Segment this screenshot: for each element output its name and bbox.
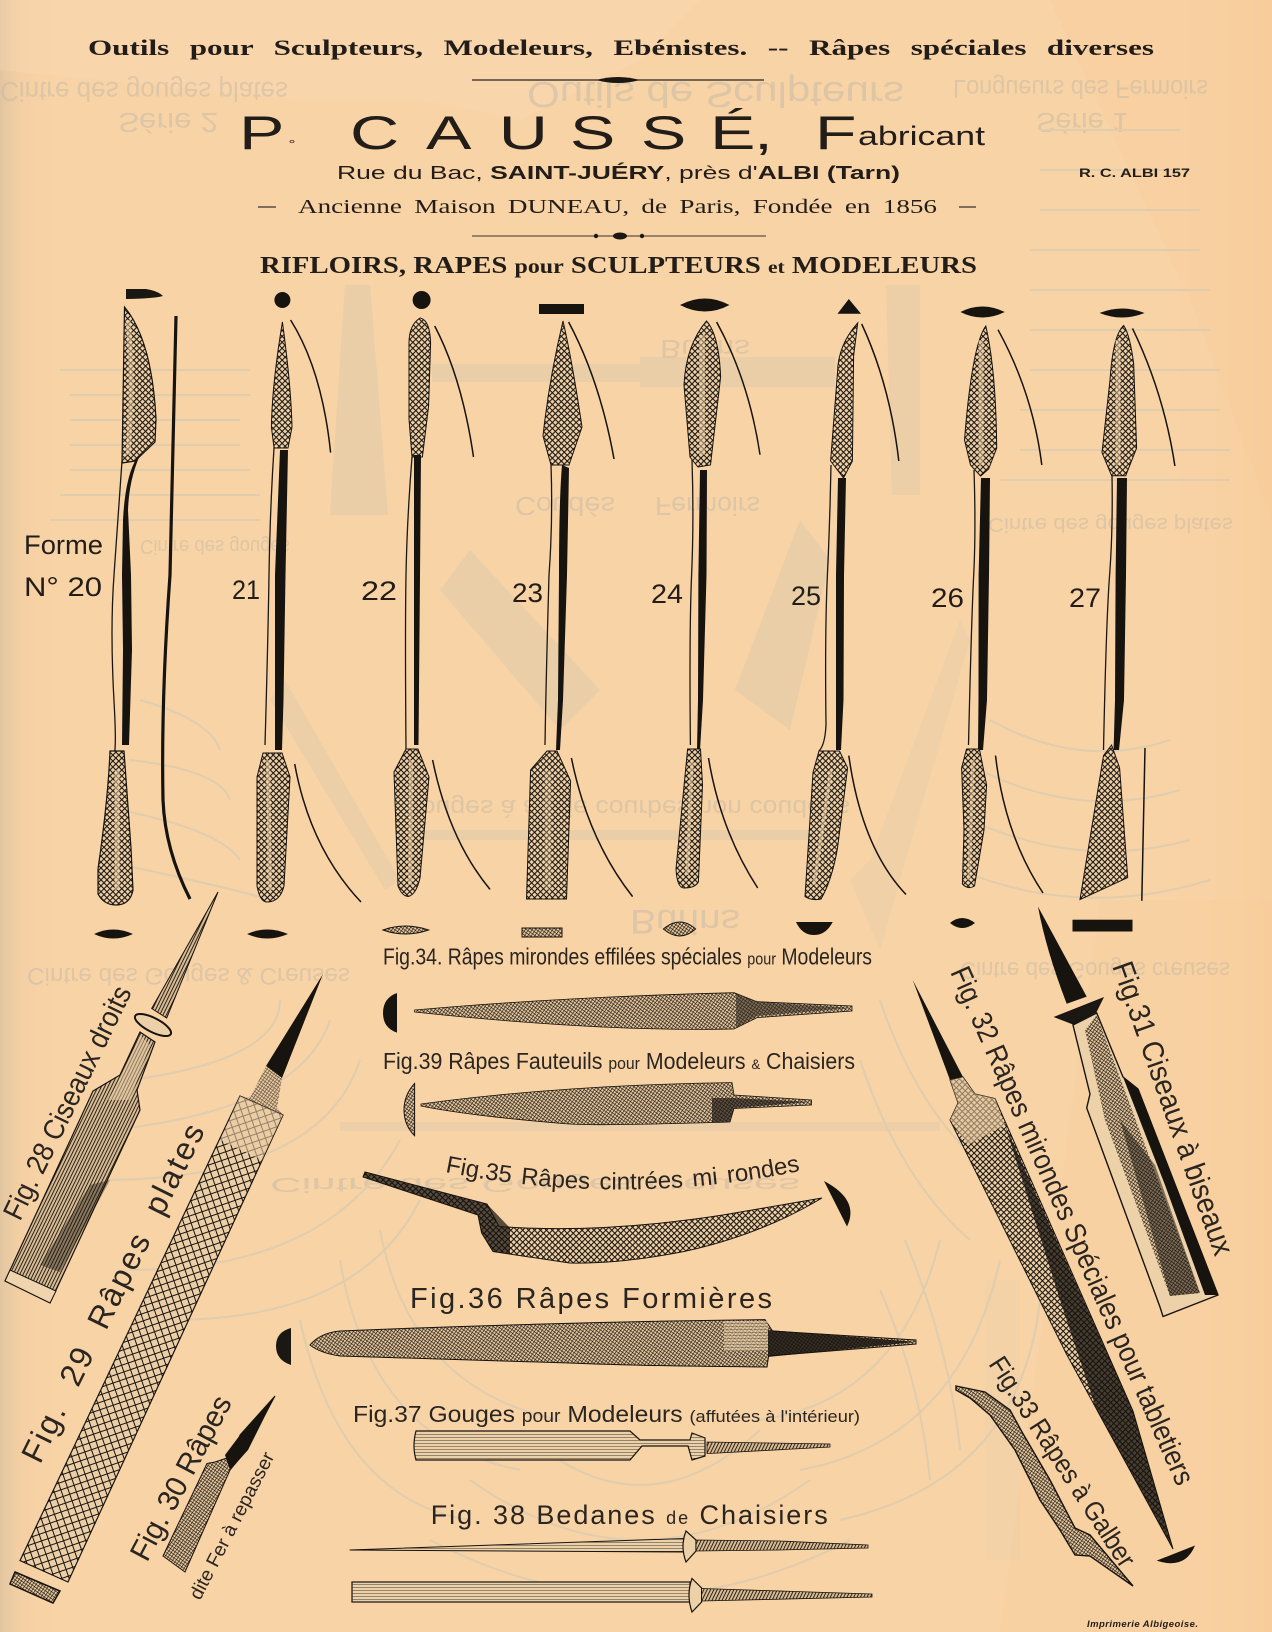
label 21: 21 xyxy=(232,575,260,605)
label 23: 23 xyxy=(512,578,543,608)
company name: F xyxy=(815,107,857,159)
section 39 xyxy=(404,1084,415,1136)
tang 29 xyxy=(266,974,323,1078)
tool 33 xyxy=(956,1386,1133,1586)
lower blade 25 xyxy=(805,751,848,900)
tool: forme 21 xyxy=(232,292,361,938)
upper blade 20 xyxy=(122,307,156,463)
top title line: Outils pour Sculpteurs, Modeleurs, Ebénistes. -- Râpes spéciales diverses xyxy=(88,35,1155,60)
blade 28 xyxy=(5,1032,155,1303)
stem 25 xyxy=(819,465,846,751)
tool: forme 27 xyxy=(1069,308,1175,932)
label fig 38: Fig. 38 Bedanes de Chaisiers xyxy=(431,1500,828,1530)
company name: CAUSSÉ, xyxy=(350,107,773,159)
upper blade 25 xyxy=(831,323,858,478)
cross section 23 top xyxy=(539,304,584,314)
section heading: RIFLOIRS, RAPES pour SCULPTEURS et MODELEURS xyxy=(260,253,977,279)
upper blade 26 xyxy=(964,326,997,476)
show-through print from reverse side: Cintre des gouges plates xyxy=(0,76,288,107)
label fig 37: Fig.37 Gouges pour Modeleurs (affutées à l'intérieur) xyxy=(353,1401,860,1427)
label fig 39: Fig.39 Râpes Fauteuils pour Modeleurs & Chaisiers xyxy=(383,1048,855,1074)
upper blade 23 xyxy=(543,321,582,465)
stem 27 xyxy=(1104,475,1127,750)
company name: ° xyxy=(289,138,296,151)
cross section 27 bottom xyxy=(1072,920,1132,932)
cross section 26 bottom xyxy=(950,918,975,928)
show-through print from reverse side: Outils de Sculpteurs xyxy=(527,74,904,115)
show-through print from reverse side: Fermoirs xyxy=(655,491,760,521)
stem 24 xyxy=(690,460,707,750)
side profile 26 xyxy=(996,330,1043,893)
lower blade 23 xyxy=(526,751,571,899)
cross section 25 bottom xyxy=(796,922,833,935)
label forme 20: Forme xyxy=(24,530,103,560)
cross section 23 bottom xyxy=(522,928,562,937)
tool: forme 25 xyxy=(791,299,906,935)
cross section 22 bottom xyxy=(383,926,429,934)
side profile 22 xyxy=(433,326,490,889)
body 32 xyxy=(950,1077,1173,1549)
label fig 33: Fig.33 Râpes à Galber xyxy=(983,1351,1142,1573)
tool 38b xyxy=(352,1578,872,1612)
tool 35 xyxy=(363,1172,822,1263)
show-through print from reverse side: Cintre des Gouges & Creuses xyxy=(27,962,350,989)
fig 39 rapes fauteuils xyxy=(383,1048,855,1136)
ornament rule 2 xyxy=(472,232,766,240)
fig 33 rapes a galber xyxy=(956,1351,1142,1586)
body 29 xyxy=(20,1096,283,1582)
show-through print from reverse side: Cintre des gouges xyxy=(140,535,290,557)
tool: forme 26 xyxy=(931,306,1043,928)
label fig 36: Fig.36 Râpes Formières xyxy=(410,1283,772,1315)
lower blade 21 xyxy=(257,753,290,902)
address line: Rue du Bac, SAINT-JUÉRY , près d' ALBI (Tarn) xyxy=(337,162,900,183)
file 39 xyxy=(421,1083,812,1125)
lower blade 22 xyxy=(394,749,429,896)
side profile 23 xyxy=(569,322,633,897)
label fig 30: Fig. 30 Râpes xyxy=(124,1390,239,1566)
stem 22 xyxy=(406,455,421,749)
label 22: 22 xyxy=(361,576,397,606)
tool 38a xyxy=(350,1531,868,1562)
section 36 xyxy=(276,1328,291,1365)
fig 37 gouges pour modeleurs xyxy=(353,1401,860,1460)
side profile 21 xyxy=(291,320,361,902)
cross section 21 bottom xyxy=(247,930,288,938)
file 36 xyxy=(310,1320,916,1367)
label fig 35: Fig.35 Râpes cintrées mi rondes xyxy=(446,1156,799,1192)
fig 38 bedanes de chaisiers xyxy=(350,1500,872,1612)
stem 23 xyxy=(545,465,569,750)
tool: forme 23 xyxy=(512,304,633,937)
cross section 22 top xyxy=(413,291,431,309)
cross section 24 bottom xyxy=(663,922,696,936)
label 26: 26 xyxy=(931,583,964,613)
fig 35 rapes cintrees xyxy=(362,1156,850,1264)
file 34 xyxy=(415,993,852,1029)
side profile 27 xyxy=(1132,328,1175,901)
side profile 24 xyxy=(708,322,760,888)
lower blade 24 xyxy=(676,749,702,888)
label forme 20: N° 20 xyxy=(24,572,102,602)
show-through print from reverse side: Série 1 xyxy=(1036,107,1128,138)
company name xyxy=(239,107,857,159)
side profile 25 xyxy=(849,324,906,894)
label 25: 25 xyxy=(791,581,821,611)
fig 28 ciseaux droits xyxy=(0,892,218,1303)
tool: forme 24 xyxy=(651,298,760,936)
show-through print from reverse side: Coudés xyxy=(515,491,615,521)
show-through print from reverse side: Burins xyxy=(630,902,740,940)
header block xyxy=(88,35,1190,279)
cross section 24 top xyxy=(680,298,730,312)
lower blade 26 xyxy=(962,749,987,888)
cross section 26 top xyxy=(960,306,1005,318)
show-through print from reverse side: Cintre des Gouges creuses xyxy=(270,1173,800,1195)
label fig 32: Fig. 32 Râpes mirondes Spéciales pour tabletiers xyxy=(944,962,1200,1490)
tang 32 xyxy=(913,980,963,1080)
label 24: 24 xyxy=(651,579,683,609)
show-through print from reverse side: Série 2 xyxy=(118,107,218,138)
cross section 20 top xyxy=(126,289,163,299)
collar 28 xyxy=(132,1010,174,1040)
show-through print from reverse side: Longueurs des Fermoirs xyxy=(953,74,1208,104)
section 29 xyxy=(10,1572,60,1603)
show-through print from reverse side: Cintre des Gouges creuses xyxy=(960,956,1230,983)
tool: forme 22 xyxy=(361,291,490,934)
fig 30 rapes dite fer a repasser xyxy=(124,1390,280,1603)
ancienne maison line: Ancienne Maison DUNEAU, de Paris, Fondée en 1856 xyxy=(298,197,937,218)
show-through print from reverse side: Burins xyxy=(660,334,750,364)
tang 28 xyxy=(152,892,218,1018)
cross section 21 top xyxy=(274,292,290,308)
label fig 28: Fig. 28 Ciseaux droits xyxy=(0,981,139,1225)
tool 37 xyxy=(414,1431,705,1460)
stem 21 xyxy=(265,448,288,750)
company name: P xyxy=(239,107,284,159)
upper blade 22 xyxy=(409,318,431,457)
blade 31 xyxy=(1073,1013,1218,1316)
cross section 20 bottom xyxy=(94,930,133,938)
bevel 31 xyxy=(1123,1077,1218,1295)
tang 31 xyxy=(1038,907,1087,1004)
collar 31 xyxy=(1055,998,1103,1024)
label fig 34: Fig.34. Râpes mirondes effilées spéciales pour Modeleurs xyxy=(383,944,872,970)
stem 20 xyxy=(110,455,140,756)
registry note: R. C. ALBI 157 xyxy=(1079,168,1190,180)
show-through print from reverse side: Cintre des gouges plates xyxy=(988,513,1233,535)
upper blade 27 xyxy=(1102,326,1137,476)
label fig 31: Fig.31 Ciseaux à biseaux xyxy=(1105,957,1240,1260)
label fig 29: Fig. 29 Râpes plates xyxy=(14,1118,212,1468)
fig 29 rapes plates xyxy=(10,974,323,1603)
fig 34 rapes mirondes effilees xyxy=(383,944,872,1033)
show-through print from reverse side: Gouges à angle courbes non coudées xyxy=(400,794,850,821)
fabricant: abricant xyxy=(858,121,986,151)
section 32 xyxy=(1157,1546,1195,1563)
lower blade 20 xyxy=(98,751,133,905)
fig 31 ciseaux a biseaux xyxy=(1038,907,1240,1316)
label 27: 27 xyxy=(1069,583,1101,613)
upper blade 21 xyxy=(271,322,292,448)
tool: forme 20 xyxy=(24,289,190,938)
side profile 20 xyxy=(163,316,190,899)
label dite fer: dite Fer à repasser xyxy=(186,1448,280,1603)
section 35 xyxy=(824,1181,850,1226)
cross section 27 top xyxy=(1100,308,1145,318)
section 34 xyxy=(383,993,397,1033)
fig 32 rapes mirondes tabletiers xyxy=(913,962,1200,1563)
cross section 25 top xyxy=(838,299,861,314)
lower blade 27 xyxy=(1080,745,1128,900)
stem 26 xyxy=(968,470,990,750)
printer credit: Imprimerie Albigeoise. xyxy=(1087,1619,1198,1630)
upper blade 24 xyxy=(684,321,721,467)
tang 37 xyxy=(707,1442,830,1454)
fig 36 rapes formieres xyxy=(276,1283,916,1367)
tool 30 xyxy=(163,1396,275,1572)
ornament rule 1 xyxy=(472,77,764,83)
label forme 20 xyxy=(24,530,103,602)
